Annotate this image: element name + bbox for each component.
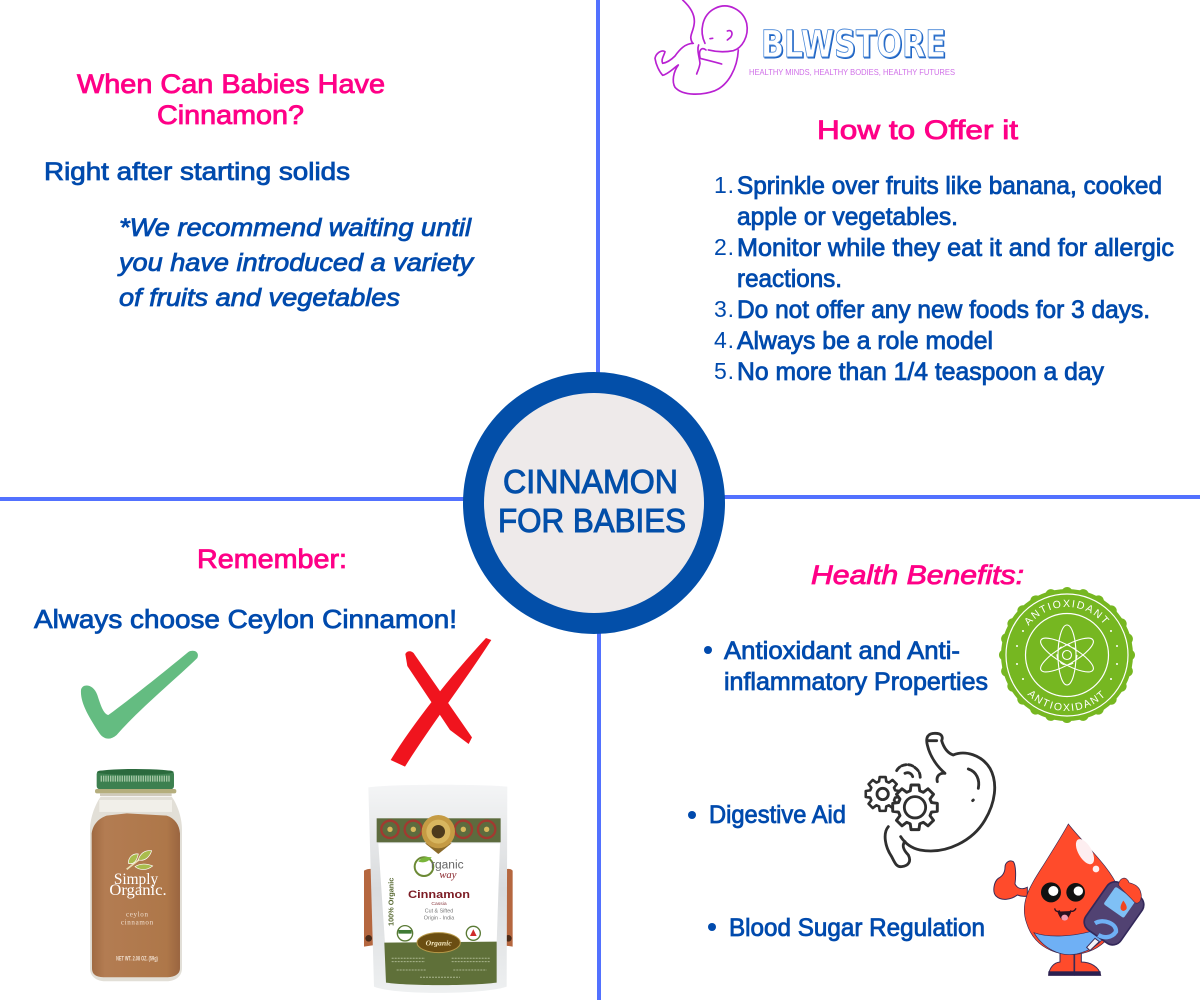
numbered list: No more than 1/4 teaspoon a day — [737, 358, 1104, 386]
logo wordmark: BLWSTORE — [761, 23, 946, 66]
icon: ceylon cinnamon jar — [90, 769, 182, 981]
panel: health benefits — [688, 560, 1145, 976]
icon: ceylon cinnamon jar: cinnamon — [121, 919, 154, 927]
icon: cassia cinnamon bag: way — [439, 870, 457, 881]
numbered list: reactions. — [737, 265, 842, 293]
text: recommendation note: you have introduced a variety — [117, 249, 475, 277]
heading: how to offer it: How to Offer it — [817, 115, 1019, 145]
icon: ceylon cinnamon jar: Organic. — [109, 882, 167, 899]
icon: stomach with gears — [866, 733, 995, 867]
text: right after starting solids: Right after starting solids — [44, 158, 350, 186]
icon: antioxidant badge: ANTIOXIDANT — [1025, 600, 1110, 626]
panel: remember — [34, 544, 513, 993]
numbered list: Always be a role model — [737, 327, 993, 355]
numbered list: 2. — [714, 234, 734, 260]
icon: antioxidant badge — [999, 587, 1135, 723]
heading: when can babies have cinnamon: Cinnamon? — [157, 100, 304, 130]
numbered list — [714, 172, 1174, 386]
text: recommendation note — [117, 214, 475, 312]
heading: when can babies have cinnamon — [77, 69, 385, 130]
benefit: antioxidant and anti-inflammatory — [704, 637, 988, 696]
logo: BLWSTORE — [655, 0, 955, 94]
icon: cassia cinnamon bag: Cinnamon — [408, 889, 470, 901]
icon: cassia cinnamon bag: Cut & Sifted — [425, 908, 453, 914]
panel: when can babies have cinnamon — [44, 69, 475, 312]
icon: ceylon cinnamon jar: NET WT. 2.08 OZ. (59g) — [116, 956, 158, 963]
panel: how to offer it — [714, 115, 1174, 386]
icon: cassia cinnamon bag: Origin - India — [424, 916, 454, 922]
numbered list: 3. — [714, 296, 734, 322]
heading: health benefits: Health Benefits: — [811, 560, 1024, 590]
benefit: antioxidant and anti-inflammatory: Antioxidant and Anti- — [724, 637, 960, 665]
icon: green check mark — [81, 651, 198, 739]
icon: cassia cinnamon bag: Organic — [426, 938, 452, 947]
badge title: FOR BABIES — [498, 502, 686, 539]
text: always choose ceylon cinnamon: Always choose Ceylon Cinnamon! — [34, 604, 457, 634]
logo tagline: HEALTHY MINDS, HEALTHY BODIES, HEALTHY FUTURES — [749, 67, 955, 77]
heading: remember: Remember: — [197, 544, 347, 574]
numbered list: Do not offer any new foods for 3 days. — [737, 296, 1150, 324]
badge circle — [474, 382, 714, 624]
icon: red cross — [391, 638, 491, 767]
badge title — [498, 463, 686, 539]
icon: baby outline — [655, 0, 747, 94]
benefit: digestive aid: Digestive Aid — [709, 801, 846, 829]
numbered list: Sprinkle over fruits like banana, cooked — [737, 172, 1162, 200]
numbered list: 5. — [714, 358, 734, 384]
heading: when can babies have cinnamon: When Can Babies Have — [77, 69, 385, 99]
center badge: cinnamon for babies — [474, 382, 714, 624]
icon: cassia cinnamon bag: Cassia — [431, 901, 447, 907]
numbered list: 1. — [714, 172, 734, 198]
text: recommendation note: *We recommend waiting until — [119, 214, 473, 242]
numbered list: 4. — [714, 327, 734, 353]
icon: antioxidant badge: ANTIOXIDANT — [1027, 690, 1104, 711]
icon: blood drop mascot with glucose meter — [994, 824, 1148, 975]
icon: cassia cinnamon bag: rganic — [431, 858, 464, 872]
benefit: blood sugar regulation: Blood Sugar Regulation — [729, 914, 985, 942]
badge title: CINNAMON — [503, 463, 678, 500]
icon: ceylon cinnamon jar: ceylon — [126, 911, 149, 919]
text: recommendation note: of fruits and vegetables — [119, 284, 400, 312]
icon: cassia cinnamon bag — [364, 785, 513, 993]
benefit: antioxidant and anti-inflammatory: inflammatory Properties — [724, 668, 988, 696]
icon: cassia cinnamon bag: 100% Organic — [389, 878, 396, 926]
numbered list: apple or vegetables. — [737, 203, 958, 231]
icon: ceylon cinnamon jar: Simply — [114, 871, 158, 888]
numbered list: Monitor while they eat it and for allergic — [737, 234, 1174, 262]
